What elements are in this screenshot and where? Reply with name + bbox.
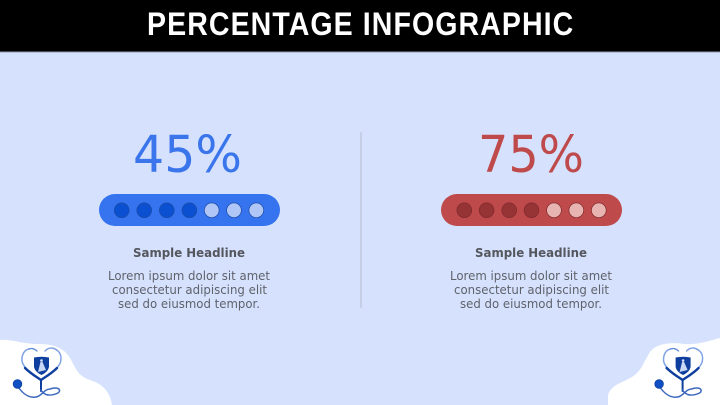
body text: sed do eiusmod tempor. xyxy=(460,297,602,311)
body text xyxy=(450,269,612,311)
headline: Sample Headline xyxy=(133,245,245,260)
corner logo: right xyxy=(608,338,720,405)
title: PERCENTAGE INFOGRAPHIC xyxy=(147,8,574,42)
body text xyxy=(108,269,270,311)
panel: 45 percent xyxy=(99,126,280,311)
body text: consectetur adipiscing elit xyxy=(454,283,609,297)
body text: sed do eiusmod tempor. xyxy=(118,297,260,311)
icon: stethoscope heart with shield xyxy=(655,348,703,397)
progress pill: blue xyxy=(99,194,280,226)
body text: Lorem ipsum dolor sit amet xyxy=(450,269,612,283)
big number 45%: 45% xyxy=(133,126,242,185)
corner logo: left xyxy=(0,340,112,405)
body text: Lorem ipsum dolor sit amet xyxy=(108,269,270,283)
headline: Sample Headline xyxy=(475,245,587,260)
progress pill: red xyxy=(441,194,622,226)
icon: stethoscope heart with shield xyxy=(13,348,61,397)
header band with title xyxy=(0,0,720,52)
panel: 75 percent xyxy=(441,126,622,311)
big number 75%: 75% xyxy=(478,126,584,185)
body text: consectetur adipiscing elit xyxy=(112,283,267,297)
